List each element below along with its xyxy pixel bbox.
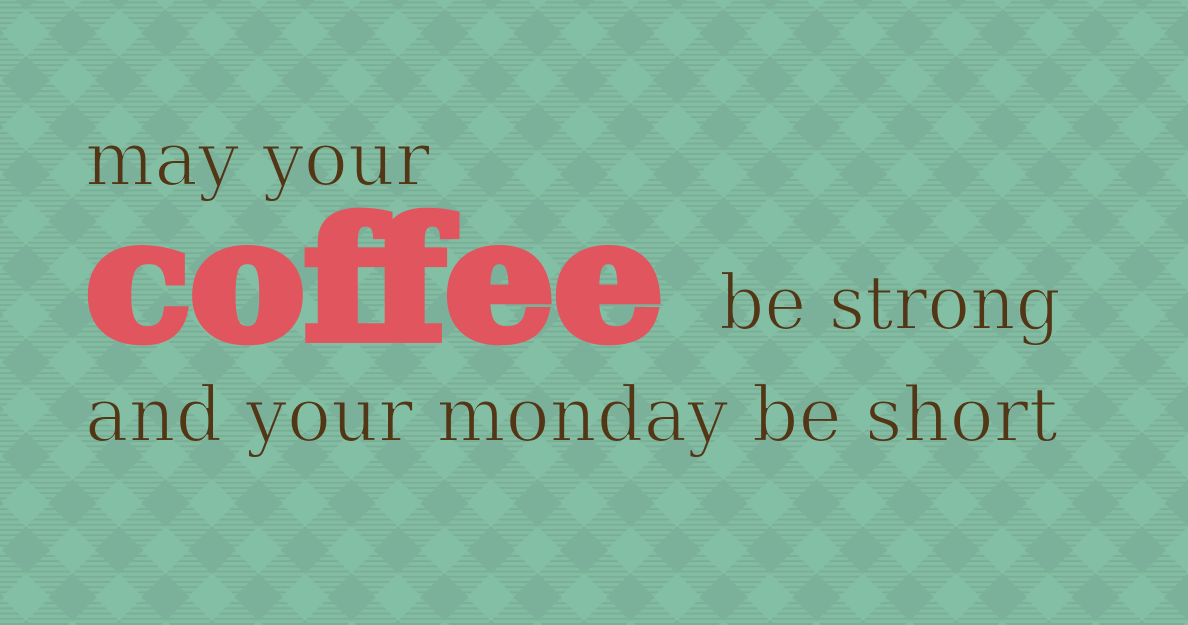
text: coffee: coffee <box>86 183 663 377</box>
text: be strong: be strong <box>719 258 1061 347</box>
text: may your: may your <box>85 114 431 203</box>
text: and your monday be short: and your monday be short <box>85 370 1058 459</box>
